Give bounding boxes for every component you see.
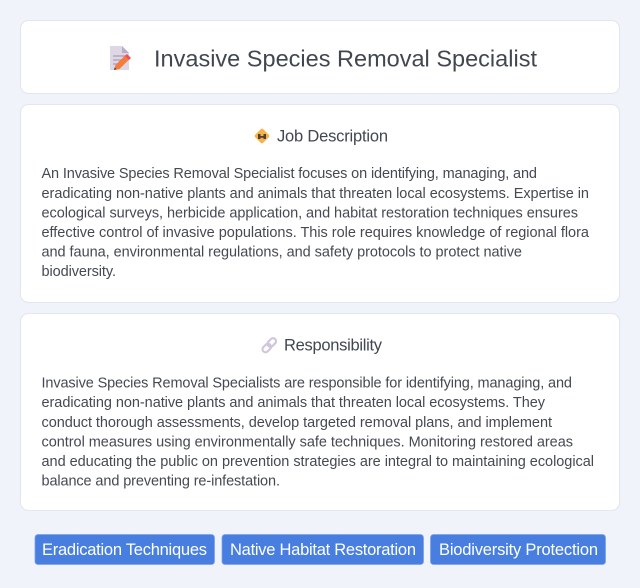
panel: job description [20, 104, 620, 302]
text block: responsibility [42, 376, 594, 490]
tag: eradication techniques [35, 534, 214, 564]
icon: link [261, 337, 277, 353]
heading: responsibility: Responsibility [284, 336, 383, 354]
text block: job description [42, 166, 590, 280]
panel: responsibility [20, 314, 620, 510]
text block: responsibility: conduct thorough assessments, develop targeted removal plans, and implement [42, 415, 552, 431]
tag: biodiversity protection [430, 534, 606, 564]
text block: job description: An Invasive Species Removal Specialist focuses on identifying, managing, and [42, 166, 537, 182]
panel: header [20, 20, 620, 94]
text block: job description: and fauna, environmental regulations, and safety protocols to protect native [42, 245, 522, 261]
text block: job description: ecological surveys, herbicide application, and habitat restoration techniques ensures [42, 205, 578, 221]
tag: native habitat restoration [222, 534, 424, 564]
text block: responsibility: Invasive Species Removal Specialists are responsible for identifying, managing, and [42, 376, 572, 392]
icon: document with pencil [110, 46, 131, 70]
text block: responsibility: and educating the public on prevention strategies are integral to maintaining ecological [42, 454, 594, 470]
text block: responsibility: balance and preventing re-infestation. [42, 474, 280, 490]
heading: job description: Job Description [277, 128, 388, 146]
text block: responsibility: control measures using environmentally safe techniques. Monitoring restored areas [42, 434, 573, 450]
text block: job description: eradicating non-native plants and animals that threaten local ecosystems. Expertise in [42, 186, 589, 202]
icon: diamond road sign [254, 128, 270, 144]
tag: eradication techniques: Eradication Techniques [42, 541, 207, 559]
title: Invasive Species Removal Specialist [154, 46, 537, 72]
text block: job description: effective control of invasive populations. This role requires knowledge of regional flora [42, 225, 590, 241]
text block: responsibility: eradicating non-native plants and animals that threaten local ecosystems. They [42, 395, 546, 411]
tag: native habitat restoration: Native Habitat Restoration [230, 541, 416, 559]
text block: job description: biodiversity. [42, 264, 116, 280]
tag: biodiversity protection: Biodiversity Protection [439, 541, 598, 559]
